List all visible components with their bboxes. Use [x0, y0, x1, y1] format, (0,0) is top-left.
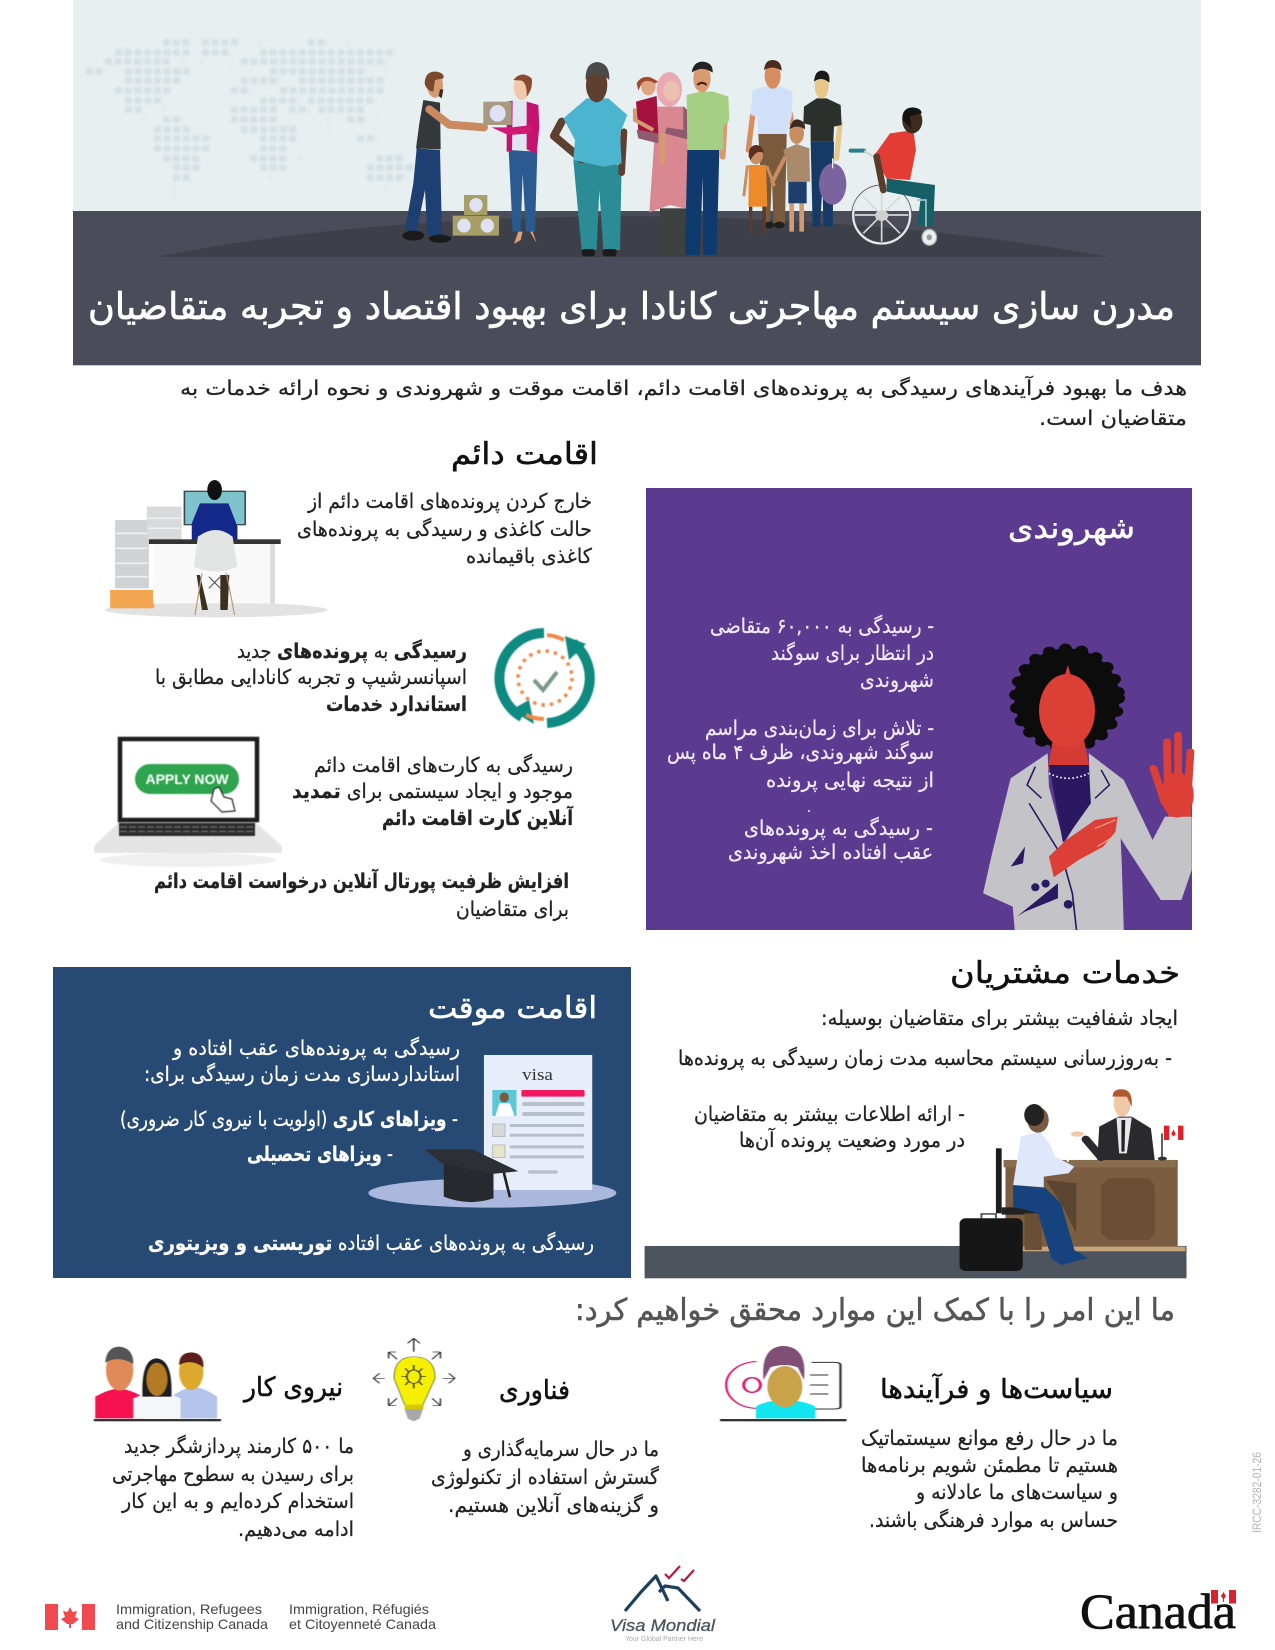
heading: workforce: نیروی کار: [242, 1372, 343, 1403]
text: item 4: افزایش ظرفیت پورتال آنلاین درخواست اقامت دائم: [154, 868, 569, 893]
logo: visa mondial: Your Global Partner Here: [625, 1636, 703, 1643]
icon: officer and applicant at desk: [645, 1089, 1186, 1278]
title: مدرن سازی سیستم مهاجرتی کانادا برای بهبود اقتصاد و تجربه متقاضیان: [88, 285, 1175, 328]
text: customer service points: [678, 1006, 1178, 1152]
text: workforce body: استخدام کرده‌ایم و به این کار: [121, 1489, 354, 1513]
icon: canadian flag: [45, 1604, 95, 1630]
heading: permanent residence: اقامت دائم: [451, 437, 598, 472]
icon: hand pointer: [211, 787, 235, 812]
person: girl in orange dress: [744, 145, 774, 234]
text: item 4: برای متقاضیان: [456, 897, 569, 921]
text: french department name: Immigration, Réfugiés: [289, 1601, 429, 1617]
person: woman in hijab with child: [635, 72, 692, 256]
icon: suitcase: [960, 1214, 1023, 1271]
text: workforce body: ما ۵۰۰ کارمند پردازشگر جدید: [124, 1434, 354, 1458]
text: citizenship points: - رسیدگی به ۶۰,۰۰۰ متقاضی: [710, 614, 934, 638]
text: policies body: هستیم تا مطمئن شویم برنامه‌ها: [861, 1453, 1118, 1477]
person: applicant: [996, 1104, 1088, 1265]
text: citizenship points: سوگند شهروندی، ظرف ۴ ماه پس: [667, 740, 934, 764]
icon: person with gear and document: [720, 1346, 847, 1421]
icon: woman taking oath: [983, 648, 1194, 930]
section: workforce: [94, 1347, 354, 1541]
text: item 2: اسپانسرشیپ و تجربه کانادایی مطابق با: [155, 665, 467, 689]
section: policies and processes: [720, 1346, 1118, 1532]
text: french department name: [289, 1601, 436, 1632]
text: item 1: [297, 489, 592, 568]
panel: hero banner: [73, 0, 1201, 366]
icon: stacked boxes: [453, 195, 499, 236]
text: citizenship points: از نتیجه نهایی پرونده: [766, 768, 934, 792]
section: permanent residence items: [94, 480, 592, 921]
people: group of newcomers (right): [685, 60, 937, 255]
person: man in green shirt: [685, 62, 729, 255]
text: english department name: and Citizenship Canada: [116, 1616, 268, 1632]
heading: citizenship: شهروندی: [1008, 511, 1135, 546]
text: policies body: ما در حال رفع موانع سیستماتیک: [861, 1426, 1118, 1450]
heading: temporary residence: اقامت موقت: [428, 991, 597, 1026]
text: temporary residence points: [120, 1036, 594, 1255]
person: tall man in blue shirt: [748, 60, 793, 228]
section: technology: [373, 1338, 659, 1517]
text: technology body: و گزینه‌های آنلاین هستیم.: [448, 1492, 659, 1517]
text: customer service points: ایجاد شفافیت بیشتر برای متقاضیان بوسیله:: [821, 1006, 1178, 1030]
text: workforce body: [112, 1434, 354, 1541]
person: woman with cardigan: [483, 75, 539, 244]
text: citizenship points: [667, 614, 934, 864]
person: man handing box: [402, 72, 484, 243]
person: large man in teal shirt: [554, 62, 627, 256]
text: citizenship points: شهروندی: [860, 668, 934, 692]
icon: visa document and graduation cap: [368, 1055, 616, 1208]
text: item 3: رسیدگی به کارت‌های اقامت دائم: [314, 753, 573, 777]
text: item 4: [154, 868, 569, 921]
person: officer: [1071, 1089, 1155, 1160]
icon: laptop with apply now button: [94, 739, 282, 867]
logo: canada wordmark: Canada: [1080, 1583, 1236, 1639]
text block: introduction: متقاضیان است.: [1039, 406, 1187, 430]
text: citizenship points: - رسیدگی به پرونده‌های: [744, 816, 933, 840]
person: boy: [772, 119, 810, 232]
text: technology body: [431, 1437, 659, 1517]
person: man in wheelchair: [851, 107, 937, 245]
text: customer service points: - به‌روزرسانی سیستم محاسبه مدت زمان رسیدگی به پرونده‌ها: [678, 1046, 1172, 1070]
text: temporary residence points: - ویزاهای تحصیلی: [247, 1142, 393, 1166]
text: customer service points: در مورد وضعیت پرونده آن‌ها: [739, 1127, 965, 1152]
heading: policies and processes: سیاست‌ها و فرآیندها: [880, 1373, 1113, 1405]
footer: department signature: [45, 1601, 436, 1632]
text: item 3: [292, 753, 574, 830]
text: item 3: موجود و ایجاد سیستمی برای تمدید: [292, 779, 573, 803]
text: citizenship points: عقب افتاده اخذ شهروندی: [728, 840, 933, 864]
text: policies body: و سیاست‌های ما عادلانه و: [915, 1480, 1118, 1504]
text block: introduction: هدف ما بهبود فرآیندهای رسیدگی به پرونده‌های اقامت دائم، اقامت موقت و شهروندی و نحوه ارائه خدمات به: [180, 375, 1187, 400]
text: temporary residence points: رسیدگی به پرونده‌های عقب افتاده و: [172, 1036, 460, 1060]
icon: three people: [94, 1347, 221, 1421]
logo: visa mondial: Visa Mondial: [610, 1616, 716, 1635]
person: young man in black shirt with bag: [803, 71, 846, 227]
text: temporary residence points: - ویزاهای کاری (اولویت با نیروی کار ضروری): [120, 1107, 458, 1131]
map: dotted world map: [86, 42, 415, 196]
text: english department name: [116, 1601, 268, 1632]
text: citizenship points: - تلاش برای زمان‌بندی مراسم: [705, 716, 934, 740]
logo: visa mondial: [610, 1566, 716, 1643]
icon: person at desk with paper stacks: [105, 480, 327, 617]
icon: canadian flag on desk: [1158, 1126, 1183, 1161]
heading: customer service: خدمات مشتریان: [950, 956, 1180, 991]
text: policies body: [861, 1426, 1118, 1532]
text: customer service points: - ارائه اطلاعات بیشتر به متقاضیان: [694, 1102, 965, 1126]
text: item 3: آنلاین کارت اقامت دائم: [382, 805, 574, 830]
label: visa: visa: [522, 1065, 553, 1084]
text: item 1: حالت کاغذی و رسیدگی به پرونده‌های: [297, 517, 592, 541]
text: item 2: استاندارد خدمات: [326, 692, 467, 716]
text: technology body: ما در حال سرمایه‌گذاری و: [462, 1437, 659, 1461]
text block: introduction: [180, 375, 1187, 430]
icon: raised hand: [1153, 735, 1194, 818]
people: group of newcomers (left): [402, 62, 692, 256]
heading: technology: فناوری: [499, 1375, 570, 1406]
text: citizenship points: در انتظار برای سوگند: [771, 641, 934, 665]
text: technology body: گسترش استفاده از تکنولوژی: [431, 1465, 659, 1489]
button label: APPLY NOW: [146, 771, 229, 787]
text: item 1: کاغذی باقیمانده: [466, 544, 592, 568]
text: item 2: رسیدگی به پرونده‌های جدید: [237, 639, 467, 663]
text: item 2: [155, 639, 467, 716]
panel: citizenship: [646, 488, 1194, 930]
text: policies body: حساس به موارد فرهنگی باشند.: [869, 1508, 1118, 1532]
text: workforce body: ادامه می‌دهیم.: [238, 1517, 354, 1541]
text: temporary residence points: استانداردسازی مدت زمان رسیدگی برای:: [144, 1062, 460, 1086]
text: workforce body: برای رسیدن به سطوح مهاجرتی: [112, 1462, 354, 1486]
icon: cycle check mark: [499, 633, 590, 724]
text: temporary residence points: رسیدگی به پرونده‌های عقب افتاده توریستی و ویزیتوری: [148, 1231, 594, 1255]
panel: temporary residence: [53, 967, 631, 1278]
icon: light bulb with arrows: [373, 1338, 455, 1421]
section: customer service: [645, 956, 1186, 1278]
heading: how we will achieve this: ما این امر را با کمک این موارد محقق خواهیم کرد:: [575, 1293, 1175, 1328]
text: item 1: خارج کردن پرونده‌های اقامت دائم از: [307, 489, 592, 513]
text: french department name: et Citoyenneté Canada: [289, 1616, 436, 1632]
text: english department name: Immigration, Refugees: [116, 1601, 262, 1617]
text: document code: IRCC-3282-01-26: [1250, 1452, 1264, 1533]
